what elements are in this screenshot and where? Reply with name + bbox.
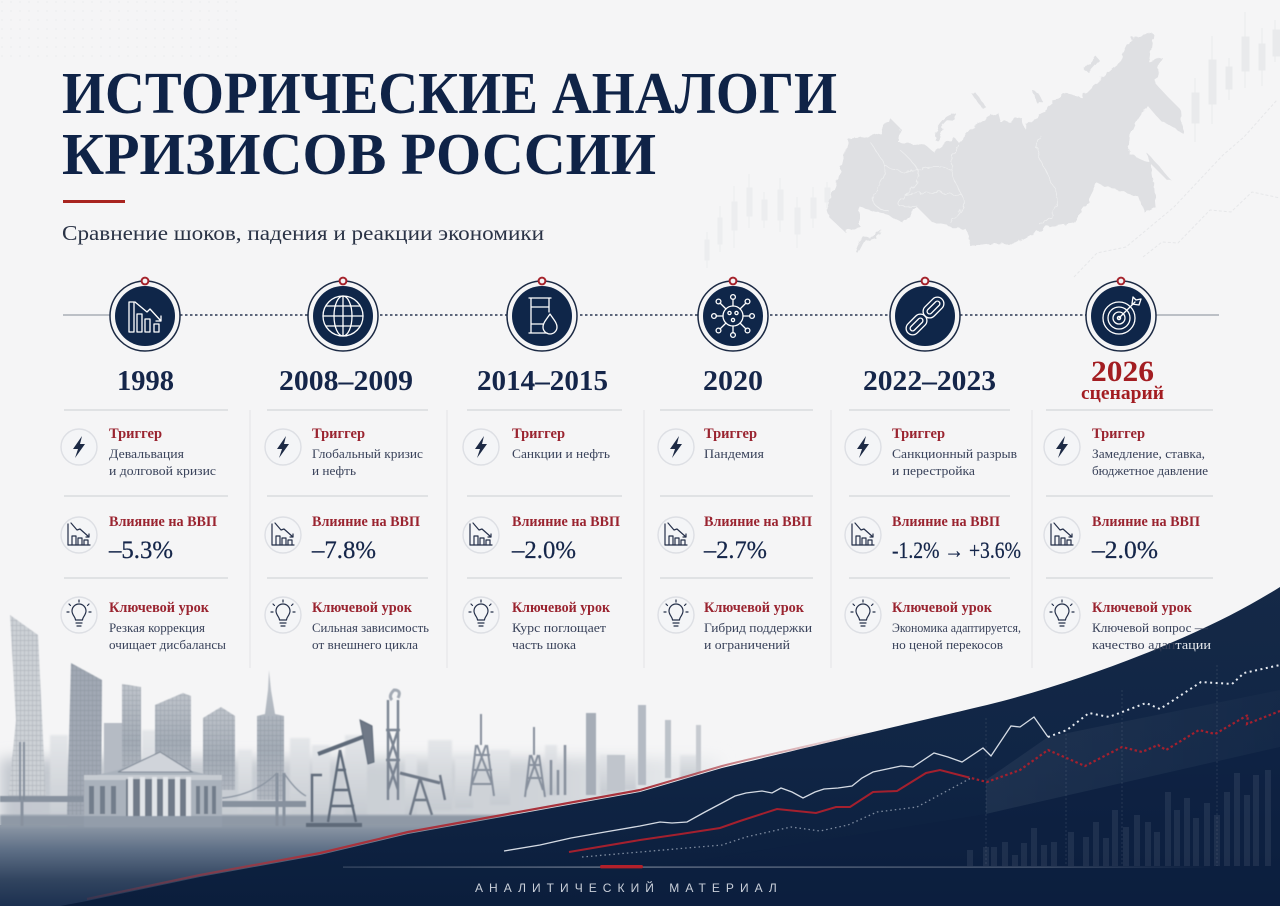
dark wedge with charts	[60, 587, 1280, 906]
GDP impact: Влияние на ВВП	[312, 514, 420, 530]
key lesson: Ключевой урок	[892, 600, 993, 616]
key lesson: качество адап тации	[1092, 637, 1211, 652]
key lesson: Ключевой вопрос —	[1092, 620, 1209, 635]
trigger: Триггер	[512, 426, 565, 442]
GDP impact	[658, 514, 812, 564]
year and scenario label	[1081, 355, 1164, 404]
panel: 2014–2015	[463, 365, 622, 652]
red dotted forecast line	[967, 711, 1280, 782]
key lesson	[463, 597, 611, 652]
GDP impact	[61, 514, 217, 564]
faint candlestick chart: left of map	[705, 174, 830, 268]
year and scenario label: 2026	[1091, 355, 1154, 388]
key lesson	[61, 597, 226, 652]
key lesson: часть шока	[512, 637, 576, 652]
panel: 2026 scenario	[1044, 355, 1213, 652]
key lesson: Сильная зависимость	[312, 620, 429, 635]
title: КРИЗИСОВ РОССИИ	[62, 121, 656, 187]
footer	[343, 865, 1211, 895]
trigger: Санкционный разрыв	[892, 446, 1017, 461]
far buildings	[50, 725, 698, 825]
key lesson: Курс поглощает	[512, 620, 606, 635]
GDP impact	[845, 514, 1021, 563]
GDP impact: -1.2% → +3.6%	[892, 538, 1021, 563]
GDP impact	[463, 514, 620, 564]
trigger	[61, 426, 216, 478]
GDP impact	[1044, 514, 1200, 564]
key lesson: но ценой перекосов	[892, 637, 1003, 652]
ground	[0, 825, 620, 906]
trigger	[845, 426, 1017, 478]
trigger: Пандемия	[704, 446, 764, 461]
trigger: Глобальный кризис	[312, 446, 423, 461]
bridges	[0, 742, 306, 826]
title	[62, 60, 837, 187]
panel: 2008–2009	[265, 365, 429, 652]
key lesson: Ключевой урок	[1092, 600, 1193, 616]
grey dotted line	[582, 778, 971, 857]
GDP impact: Влияние на ВВП	[704, 514, 812, 530]
key lesson: Ключевой урок	[512, 600, 611, 616]
trigger	[658, 426, 764, 465]
key lesson	[845, 597, 1021, 652]
trigger: Санкции и нефть	[512, 446, 610, 461]
trigger: Триггер	[704, 426, 757, 442]
subtitle: Сравнение шоков, падения и реакции экономики	[62, 221, 544, 245]
trigger: Триггер	[312, 426, 365, 442]
pumpjacks and refinery	[306, 690, 701, 825]
trigger: бюджетное давление	[1092, 463, 1208, 478]
GDP impact: –2.7%	[703, 537, 767, 564]
timeline node: 2022 chain icon	[890, 278, 960, 351]
GDP impact: –2.0%	[1091, 537, 1158, 564]
column dividers	[250, 410, 1032, 668]
footer red accent	[600, 865, 643, 868]
timeline node: 2020 virus icon	[698, 278, 768, 351]
trigger: Триггер	[1092, 426, 1145, 442]
key lesson: Ключевой урок	[109, 600, 210, 616]
timeline node: 2026 target icon	[1086, 278, 1156, 351]
bank building	[84, 752, 222, 827]
year: 2022–2023	[863, 365, 996, 397]
trigger	[1044, 426, 1208, 478]
trigger: Триггер	[109, 426, 162, 442]
GDP impact	[265, 514, 420, 564]
volume bars	[967, 770, 1271, 866]
key lesson	[265, 597, 429, 652]
timeline node: 2014 oil barrel icon	[507, 278, 577, 351]
GDP impact: Влияние на ВВП	[109, 514, 217, 530]
trigger: и перестройка	[892, 463, 975, 478]
year: 2008–2009	[279, 365, 413, 397]
key lesson	[1044, 597, 1211, 652]
faint trend lines	[1074, 100, 1280, 277]
trigger	[265, 426, 423, 478]
white solid line	[504, 717, 1048, 851]
white dotted forecast line	[1048, 665, 1280, 737]
footer caption: АНАЛИТИЧЕСКИЙ МАТЕРИАЛ	[475, 880, 781, 895]
trigger: Девальвация	[109, 446, 184, 461]
red solid line	[569, 770, 967, 852]
faint candlestick chart: top right	[1192, 12, 1280, 142]
year: 2014–2015	[477, 365, 608, 397]
trigger: и нефть	[312, 463, 356, 478]
title accent rule	[63, 200, 125, 203]
foreground strip	[0, 815, 560, 827]
vertical guide lines	[986, 665, 1217, 866]
map of Russia	[827, 33, 1183, 253]
panel: 2020	[658, 365, 813, 652]
key lesson: Ключевой урок	[704, 600, 805, 616]
key lesson: очищает дисбалансы	[109, 637, 226, 652]
footer rule	[343, 866, 1211, 868]
red edge line	[87, 790, 640, 899]
key lesson	[658, 597, 812, 652]
timeline line	[63, 314, 1219, 316]
GDP impact: –7.8%	[311, 537, 376, 564]
trigger	[463, 426, 610, 465]
GDP impact: Влияние на ВВП	[892, 514, 1000, 530]
GDP impact: Влияние на ВВП	[1092, 514, 1200, 530]
haze	[0, 758, 720, 828]
year: 1998	[117, 365, 174, 397]
key lesson: Экономика адаптируется,	[892, 620, 1021, 635]
GDP impact: –2.0%	[511, 537, 576, 564]
title: ИСТОРИЧЕСКИЕ АНАЛОГИ	[62, 60, 837, 126]
towers	[8, 615, 284, 815]
key lesson: от внешнего цикла	[312, 637, 418, 652]
skyline	[0, 615, 720, 906]
year and scenario label: сценарий	[1081, 383, 1164, 404]
key lesson: Резкая коррекция	[109, 620, 205, 635]
lighter band	[986, 690, 1280, 814]
key lesson: и ограничений	[704, 637, 790, 652]
panel: 2022–2023	[845, 365, 1021, 652]
GDP impact: –5.3%	[108, 537, 173, 564]
panel: 1998	[61, 365, 228, 652]
timeline node: 1998 chart icon	[110, 278, 180, 351]
key lesson: Гибрид поддержки	[704, 620, 812, 635]
year: 2020	[703, 365, 763, 397]
trigger: Триггер	[892, 426, 945, 442]
key lesson: Ключевой урок	[312, 600, 413, 616]
trigger: Замедление, ставка,	[1092, 446, 1205, 461]
timeline node: 2008 globe icon	[308, 278, 378, 351]
trigger: и долговой кризис	[109, 463, 216, 478]
GDP impact: Влияние на ВВП	[512, 514, 620, 530]
